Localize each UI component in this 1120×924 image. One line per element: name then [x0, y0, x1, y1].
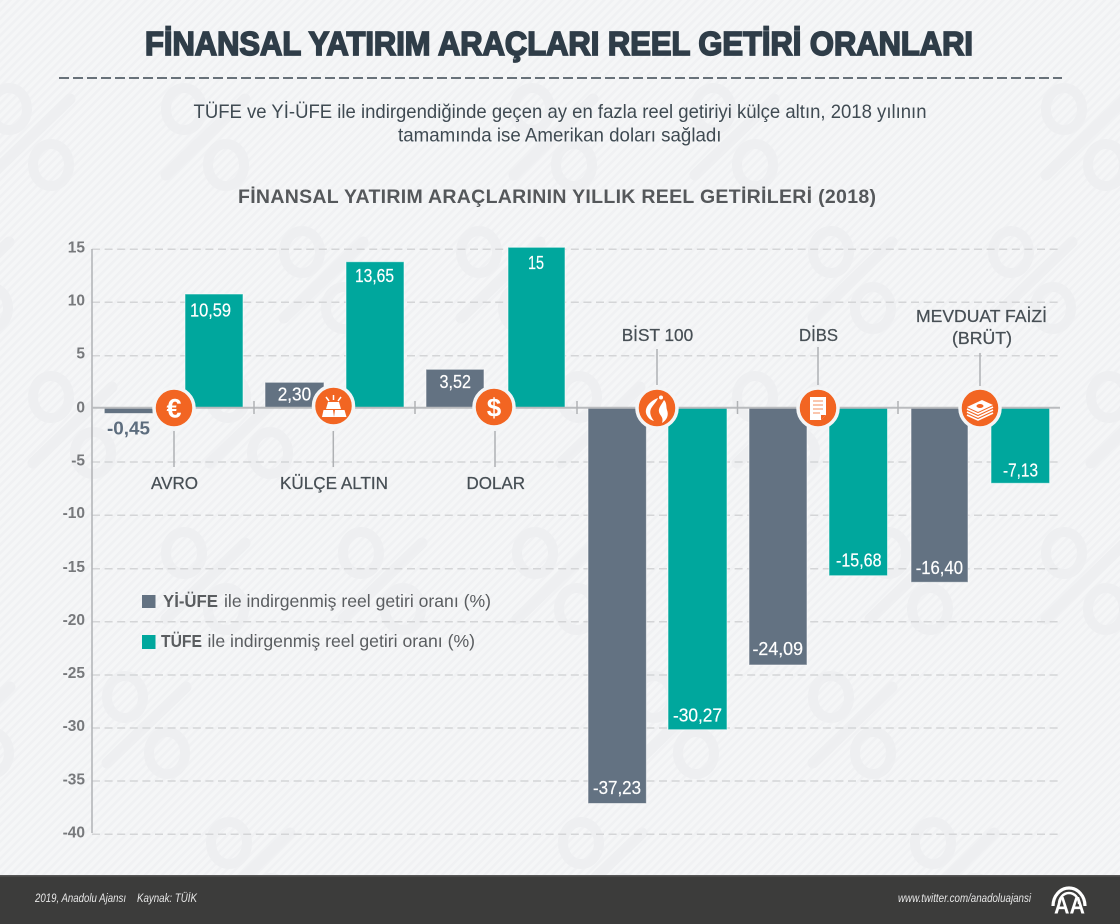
value labels: -37,23 [593, 778, 641, 798]
value labels: 2,30 [278, 385, 311, 405]
y axis labels: -10 [63, 505, 85, 522]
website text: www.twitter.com/anadoluajansi [898, 893, 1031, 905]
category labels: MEVDUAT FAİZİ [916, 306, 1047, 326]
y axis labels: 0 [76, 400, 85, 416]
category labels: KÜLÇE ALTIN [280, 473, 388, 493]
category labels: (BRÜT) [952, 328, 1012, 348]
value labels: -24,09 [752, 639, 803, 659]
connector lines [174, 347, 980, 467]
value labels: -7,13 [1003, 461, 1038, 481]
title: FİNANSAL YATIRIM ARAÇLARI REEL GETİRİ ORANLARI [145, 25, 973, 62]
value labels: -15,68 [836, 551, 882, 571]
category labels: BİST 100 [622, 325, 693, 345]
legend item: Yİ-ÜFE: ile indirgenmiş reel getiri oranı (%) [224, 591, 491, 611]
y axis labels: -35 [63, 772, 85, 788]
subtitle: TÜFE ve Yİ-ÜFE ile indirgendiğinde geçen ay en fazla reel getiriyi külçe altın, 2018 yılının [194, 100, 926, 123]
bars: KÜLÇE ALTIN [265, 262, 404, 408]
y axis labels: -15 [63, 559, 85, 576]
value labels: -30,27 [673, 706, 722, 726]
y axis labels: -20 [63, 612, 85, 629]
source text: Kaynak: TÜİK [137, 893, 198, 905]
icon: euro: € [166, 394, 182, 424]
bars: MEVDUAT FAİZİ [911, 408, 1050, 582]
y axis labels: -25 [63, 665, 85, 682]
subtitle: tamamında ise Amerikan doları sağladı [398, 124, 722, 146]
legend item: TÜFE: TÜFE [161, 631, 202, 651]
y axis labels: -5 [71, 452, 85, 470]
bars: BİST 100 [588, 408, 727, 804]
icon: dollar: $ [487, 392, 502, 422]
y axis labels: 5 [76, 346, 85, 362]
category labels: DOLAR [466, 473, 525, 493]
y axis labels: -40 [63, 824, 85, 842]
icon: gold bars [314, 386, 354, 426]
legend [142, 591, 491, 651]
subtitle [194, 100, 926, 146]
y axis labels: 10 [68, 292, 85, 310]
value labels: 3,52 [440, 372, 471, 392]
value labels [107, 253, 1038, 798]
value labels: 13,65 [355, 266, 394, 286]
bar chart [63, 240, 1060, 842]
icon: document [798, 388, 838, 428]
category labels [151, 306, 1047, 493]
category labels: AVRO [151, 473, 198, 493]
icon: money stack [960, 388, 1000, 428]
value labels: 10,59 [190, 301, 231, 321]
icon: stock exchange figure [637, 388, 677, 428]
source text: 2019, Anadolu Ajansı [34, 893, 126, 905]
legend item: TÜFE: ile indirgenmiş reel getiri oranı (%) [208, 631, 475, 651]
category labels: DİBS [799, 325, 838, 345]
legend item: Yİ-ÜFE: Yİ-ÜFE [163, 591, 218, 611]
bars: DOLAR [426, 247, 565, 408]
source text [34, 893, 198, 905]
value labels: -0,45 [107, 419, 150, 439]
y axis labels: 15 [68, 240, 85, 256]
icon: dollar [474, 387, 514, 427]
logo: Anadolu Ajansı: AA [1054, 892, 1085, 920]
value labels: 15 [528, 253, 544, 273]
bars: AVRO [104, 294, 243, 414]
y axis labels: -30 [63, 718, 85, 735]
icon: euro [154, 388, 194, 428]
chart heading: FİNANSAL YATIRIM ARAÇLARININ YILLIK REEL GETİRİLERİ (2018) [238, 185, 876, 208]
bars: DİBS [749, 408, 888, 665]
y axis labels [63, 240, 85, 842]
value labels: -16,40 [916, 558, 963, 578]
footer [0, 875, 1120, 924]
